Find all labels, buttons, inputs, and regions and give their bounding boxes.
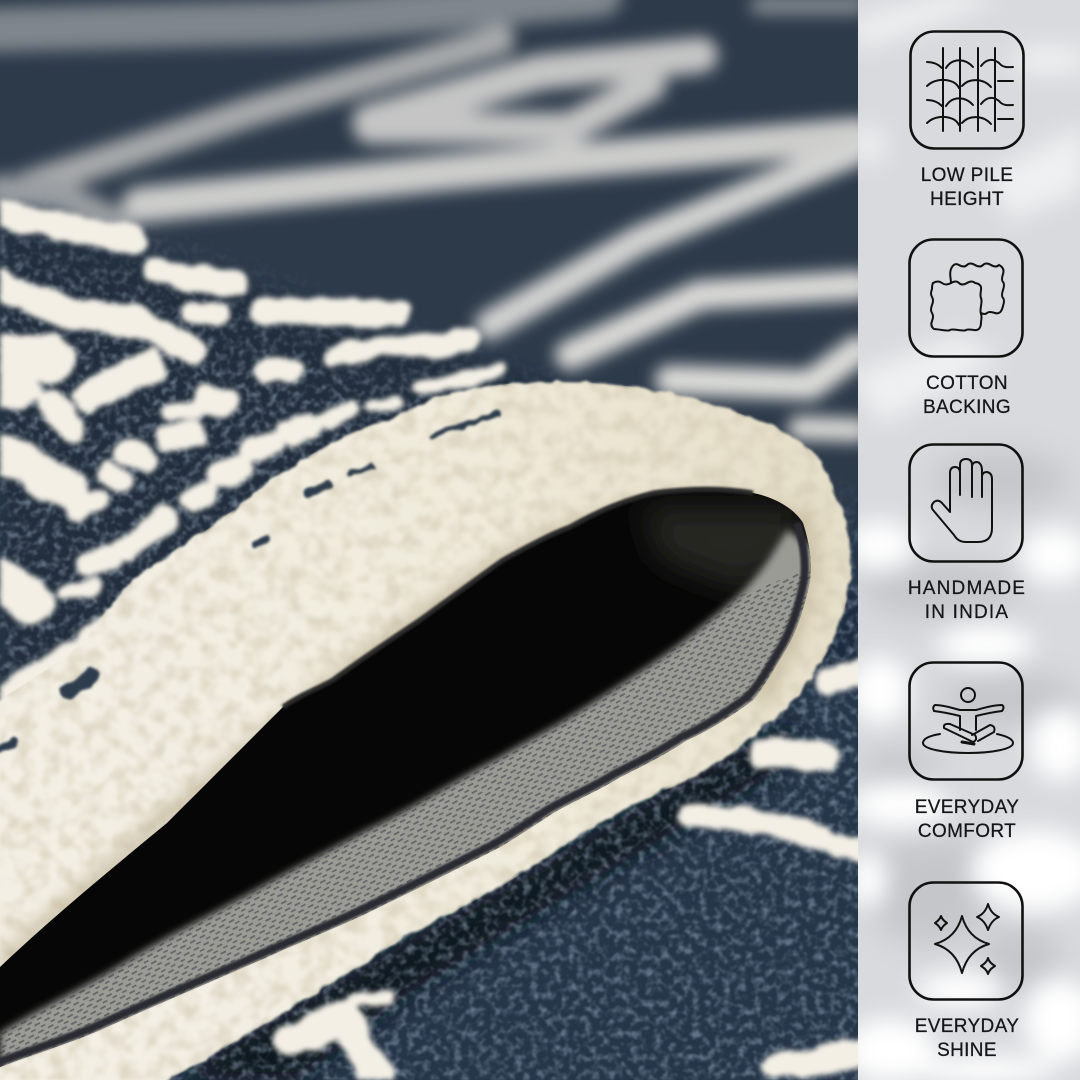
dark gaps in band	[0, 414, 498, 750]
binding line	[0, 523, 805, 1064]
label: LOW PILE	[921, 165, 1013, 186]
blurred upper pattern	[0, 0, 858, 430]
label	[921, 165, 1013, 210]
icon: seated meditation figure	[908, 661, 1024, 781]
label: COMFORT	[918, 820, 1016, 842]
label	[915, 1016, 1019, 1060]
label: HANDMADE	[908, 578, 1026, 599]
inner shadow gradient	[640, 505, 800, 590]
backing weave dashes	[0, 560, 830, 1080]
wool fibre texture on focused field	[0, 230, 858, 1080]
feature: low pile height	[909, 30, 1025, 210]
label: BACKING	[923, 396, 1011, 418]
label	[915, 797, 1019, 842]
feature: handmade in india	[908, 443, 1026, 622]
label: EVERYDAY	[915, 1016, 1019, 1037]
label: COTTON	[926, 373, 1008, 394]
panel mottling	[844, 0, 1080, 1080]
label	[923, 373, 1011, 418]
icon: sparkles	[908, 881, 1024, 1001]
feature: cotton backing	[908, 238, 1024, 418]
feature panel	[844, 0, 1080, 1080]
label: IN INDIA	[925, 602, 1009, 622]
icon: woven threads	[909, 30, 1025, 150]
icon: fabric swatches	[908, 238, 1024, 358]
background rug field	[0, 0, 858, 1080]
label	[908, 578, 1026, 622]
label: HEIGHT	[930, 188, 1004, 210]
top face white pattern	[0, 212, 860, 1075]
label: SHINE	[937, 1040, 997, 1060]
grey backing	[0, 530, 830, 1080]
rolled rug top face	[2, 233, 535, 680]
binding along top of opening	[283, 489, 753, 707]
feature: everyday comfort	[908, 661, 1024, 842]
feature: everyday shine	[908, 881, 1024, 1060]
roll opening underside	[0, 490, 811, 1067]
label: EVERYDAY	[915, 797, 1019, 818]
icon: hand	[908, 443, 1024, 563]
cream band lumps	[0, 382, 850, 1080]
roll outer cream edge	[0, 382, 850, 1080]
lower rug field	[172, 586, 858, 1080]
